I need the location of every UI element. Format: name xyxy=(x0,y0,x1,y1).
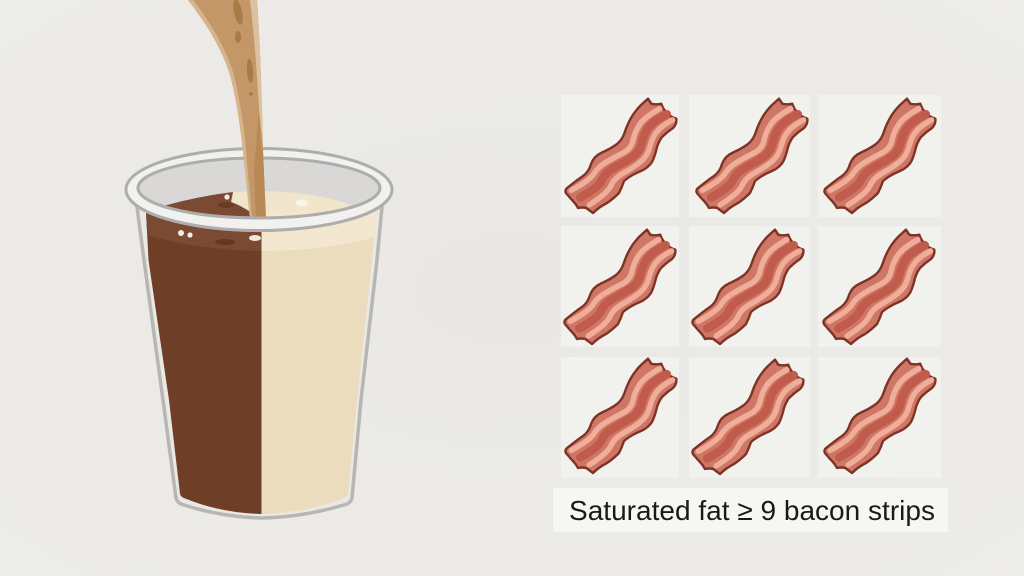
cup illustration xyxy=(126,0,392,525)
cup wall xyxy=(137,207,382,518)
creamy half xyxy=(262,212,376,514)
cup rim xyxy=(126,148,392,230)
pouring stream xyxy=(188,0,266,219)
tile 5 xyxy=(689,226,810,347)
bacon grid panel xyxy=(561,95,941,478)
stream spots xyxy=(231,0,245,26)
tile 8 xyxy=(689,357,810,478)
caption: Saturated fat ≥ 9 bacon strips xyxy=(569,495,935,526)
tile 7 xyxy=(561,357,679,478)
tile 1 xyxy=(561,95,679,217)
tile 9 xyxy=(818,357,941,478)
caption xyxy=(553,488,948,532)
liquid surface xyxy=(166,191,351,212)
tile 2 xyxy=(689,95,810,217)
infographic canvas xyxy=(124,0,948,532)
dark coffee half xyxy=(146,212,262,514)
cup interior xyxy=(138,158,380,218)
tile 3 xyxy=(818,95,941,217)
tile 6 xyxy=(818,226,941,347)
front of rim xyxy=(124,192,394,232)
tile 4 xyxy=(561,226,679,347)
